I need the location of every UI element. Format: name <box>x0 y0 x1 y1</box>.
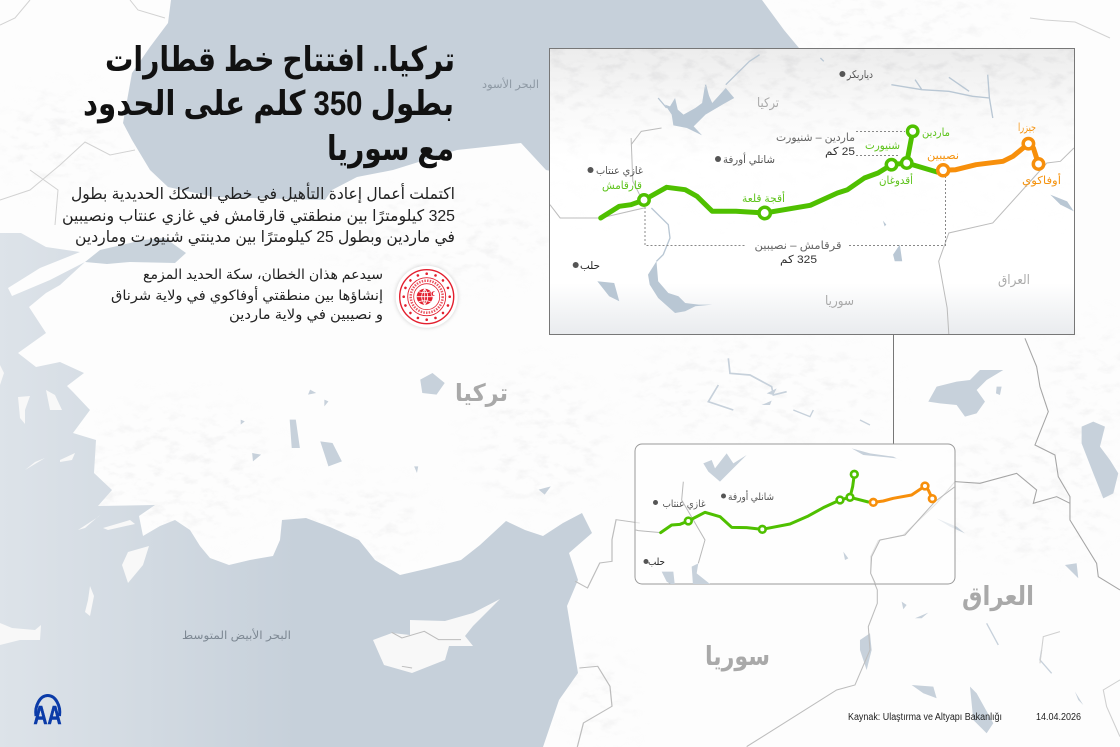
detail terrain <box>551 49 1073 112</box>
country label: Iraq: العراق <box>962 581 1034 612</box>
inset city labels: حلب <box>648 557 665 568</box>
note text: إنشاؤها بين منطقتي أوفاكوي في ولاية شرناق <box>111 286 383 304</box>
distance bracket: Mardin to Senyurt <box>856 132 905 156</box>
sea label: Mediterranean: البحر الأبيض المتوسط <box>182 628 291 642</box>
distance label: Karkamis to Nusaybin: 325 كم <box>780 254 817 266</box>
distance label: Karkamis to Nusaybin <box>754 240 842 266</box>
distance label: Karkamis to Nusaybin: قرقامش – نصيبين <box>754 240 842 252</box>
orange stations <box>938 138 1044 176</box>
description text: اكتملت أعمال إعادة التأهيل في خطي السكك الحديدية بطول <box>71 182 455 204</box>
panel: locator inset <box>630 444 955 590</box>
islands <box>0 365 500 673</box>
title: بطول 350 كلم على الحدود <box>83 85 454 124</box>
description text: 325 كيلومترًا بين منطقتي قارقامش في غازي عنتاب ونصيبين <box>62 208 455 226</box>
detail borders <box>550 128 1074 335</box>
title <box>83 41 455 169</box>
note text: سيدعم هذان الخطان، سكة الحديد المزمع <box>143 266 383 283</box>
station labels: green <box>602 127 950 205</box>
sea: Black Sea <box>123 0 810 200</box>
note text <box>111 266 383 323</box>
inset stations: orange <box>870 483 936 506</box>
inset city labels: شانلي أورفة <box>728 490 774 503</box>
note text: و نصيبين في ولاية ماردين <box>229 306 383 323</box>
distance label: Mardin to Senyurt: 25 كم <box>825 146 855 158</box>
city labels <box>573 69 873 272</box>
station labels: orange: أوفاكوي <box>1022 173 1061 187</box>
green stations <box>639 126 918 219</box>
country labels in detail map: العراق <box>998 272 1030 288</box>
inset route: green line <box>661 474 868 533</box>
description text: في ماردين وبطول 25 كيلومترًا بين مدينتي شنيورت وماردين <box>75 229 455 247</box>
detail water <box>597 55 1074 313</box>
title: مع سوريا <box>327 130 454 169</box>
connector line <box>892 335 894 444</box>
distance label: Mardin to Senyurt: ماردين – شنيورت <box>776 132 855 144</box>
inset stations: green <box>685 471 858 533</box>
distance bracket: Karkamis to Nusaybin <box>645 176 946 246</box>
station labels: orange <box>927 122 1061 187</box>
country label: Syria: سوريا <box>705 641 770 672</box>
city labels: حلب <box>580 260 600 272</box>
orange route <box>943 144 1038 170</box>
station labels: green: أقجة قلعة <box>742 191 785 205</box>
station labels: green: ماردين <box>922 127 950 139</box>
source credit: Kaynak: Ulaştırma ve Altyapı Bakanlığı <box>848 712 1002 723</box>
inset city labels <box>644 490 774 568</box>
date: 14.04.2026 <box>1036 712 1081 723</box>
station labels: orange: جيزرا <box>1018 122 1036 134</box>
logo: Anadolu Agency: AA <box>34 700 62 730</box>
station labels: green: أقدوغان <box>879 173 913 187</box>
icon: ministry seal <box>395 265 459 329</box>
sea label: Black Sea: البحر الأسود <box>482 77 539 91</box>
city labels: شانلي أورفة <box>723 152 775 166</box>
distance label: Mardin to Senyurt <box>776 132 855 158</box>
country label: Turkey: تركيا <box>455 380 508 407</box>
description text <box>62 182 455 247</box>
green route <box>601 131 937 218</box>
inset route: orange line <box>873 486 932 502</box>
city labels: غازي عنتاب <box>596 165 643 177</box>
title: تركيا.. افتتاح خط قطارات <box>105 41 455 80</box>
inset lakes and rivers <box>662 448 907 590</box>
station labels: green: شنيورت <box>865 140 900 152</box>
station labels: orange: نصيبين <box>927 150 959 162</box>
rivers <box>708 358 1052 673</box>
country labels in detail map: تركيا <box>757 95 779 111</box>
lakes <box>241 370 1118 733</box>
logo: Anadolu Agency <box>34 696 62 730</box>
inset border lines <box>630 482 955 590</box>
country labels in detail map <box>757 95 1030 309</box>
sea: Marmara <box>85 238 186 264</box>
station labels: green: قارقامش <box>602 180 642 192</box>
city labels: دياربكر <box>846 69 873 81</box>
sea: Aegean and Mediterranean <box>0 233 592 747</box>
country labels in detail map: سوريا <box>825 293 854 309</box>
panel: detail map <box>550 48 1074 335</box>
inset city labels: غازي عنتاب <box>662 499 706 510</box>
